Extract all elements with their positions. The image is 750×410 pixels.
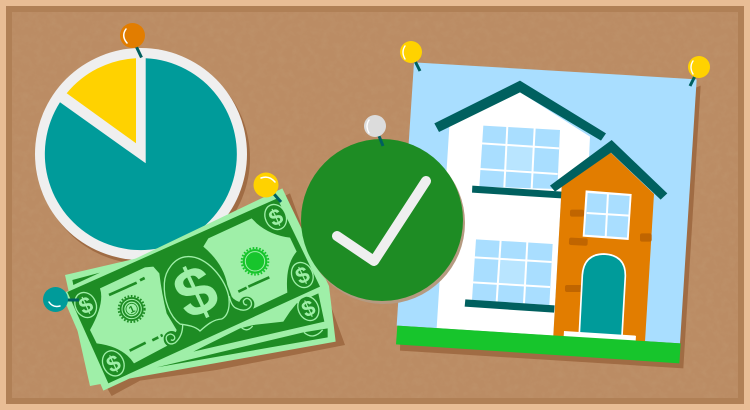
pin: yellow on money [254,172,281,202]
left light panel [90,267,177,363]
check mark badge [301,139,465,304]
corner dollar ovals: $ [102,349,125,378]
upper window [479,126,560,189]
picture shadow [400,86,701,368]
extension window [583,190,632,240]
dark seal [119,296,145,322]
stack of dollar bills [62,188,345,396]
sky paper [397,62,697,343]
lower bills: $ [298,295,319,322]
house picture [396,62,701,368]
corner dollar ovals: $ [264,202,287,231]
pin: yellow top left of house [400,41,422,71]
pin: grey on badge [364,115,386,146]
lower window [472,239,553,305]
corner dollar ovals: $ [74,290,97,319]
pie chart [35,48,250,264]
scroll curl left [164,325,183,347]
pin: teal on money [43,287,79,312]
dash lines [109,277,269,351]
orange brick extension [550,140,667,342]
right light panel [203,218,297,309]
scroll curl right [229,297,254,312]
door step [564,331,636,341]
bills shadow [97,193,345,396]
grass [396,326,681,363]
corner dollar ovals [71,201,317,379]
corner dollar ovals: $ [291,260,314,289]
check mark [337,181,426,261]
lower bills [65,237,336,386]
white main house [434,81,606,336]
bricks [565,210,652,292]
pin: yellow top right of house [688,56,710,86]
green seal [242,248,268,275]
central portrait oval with dollar: $ [163,249,229,334]
pin: orange [120,23,145,58]
door [579,254,625,336]
dark seal: 1 [127,304,137,316]
top bill [62,188,329,391]
